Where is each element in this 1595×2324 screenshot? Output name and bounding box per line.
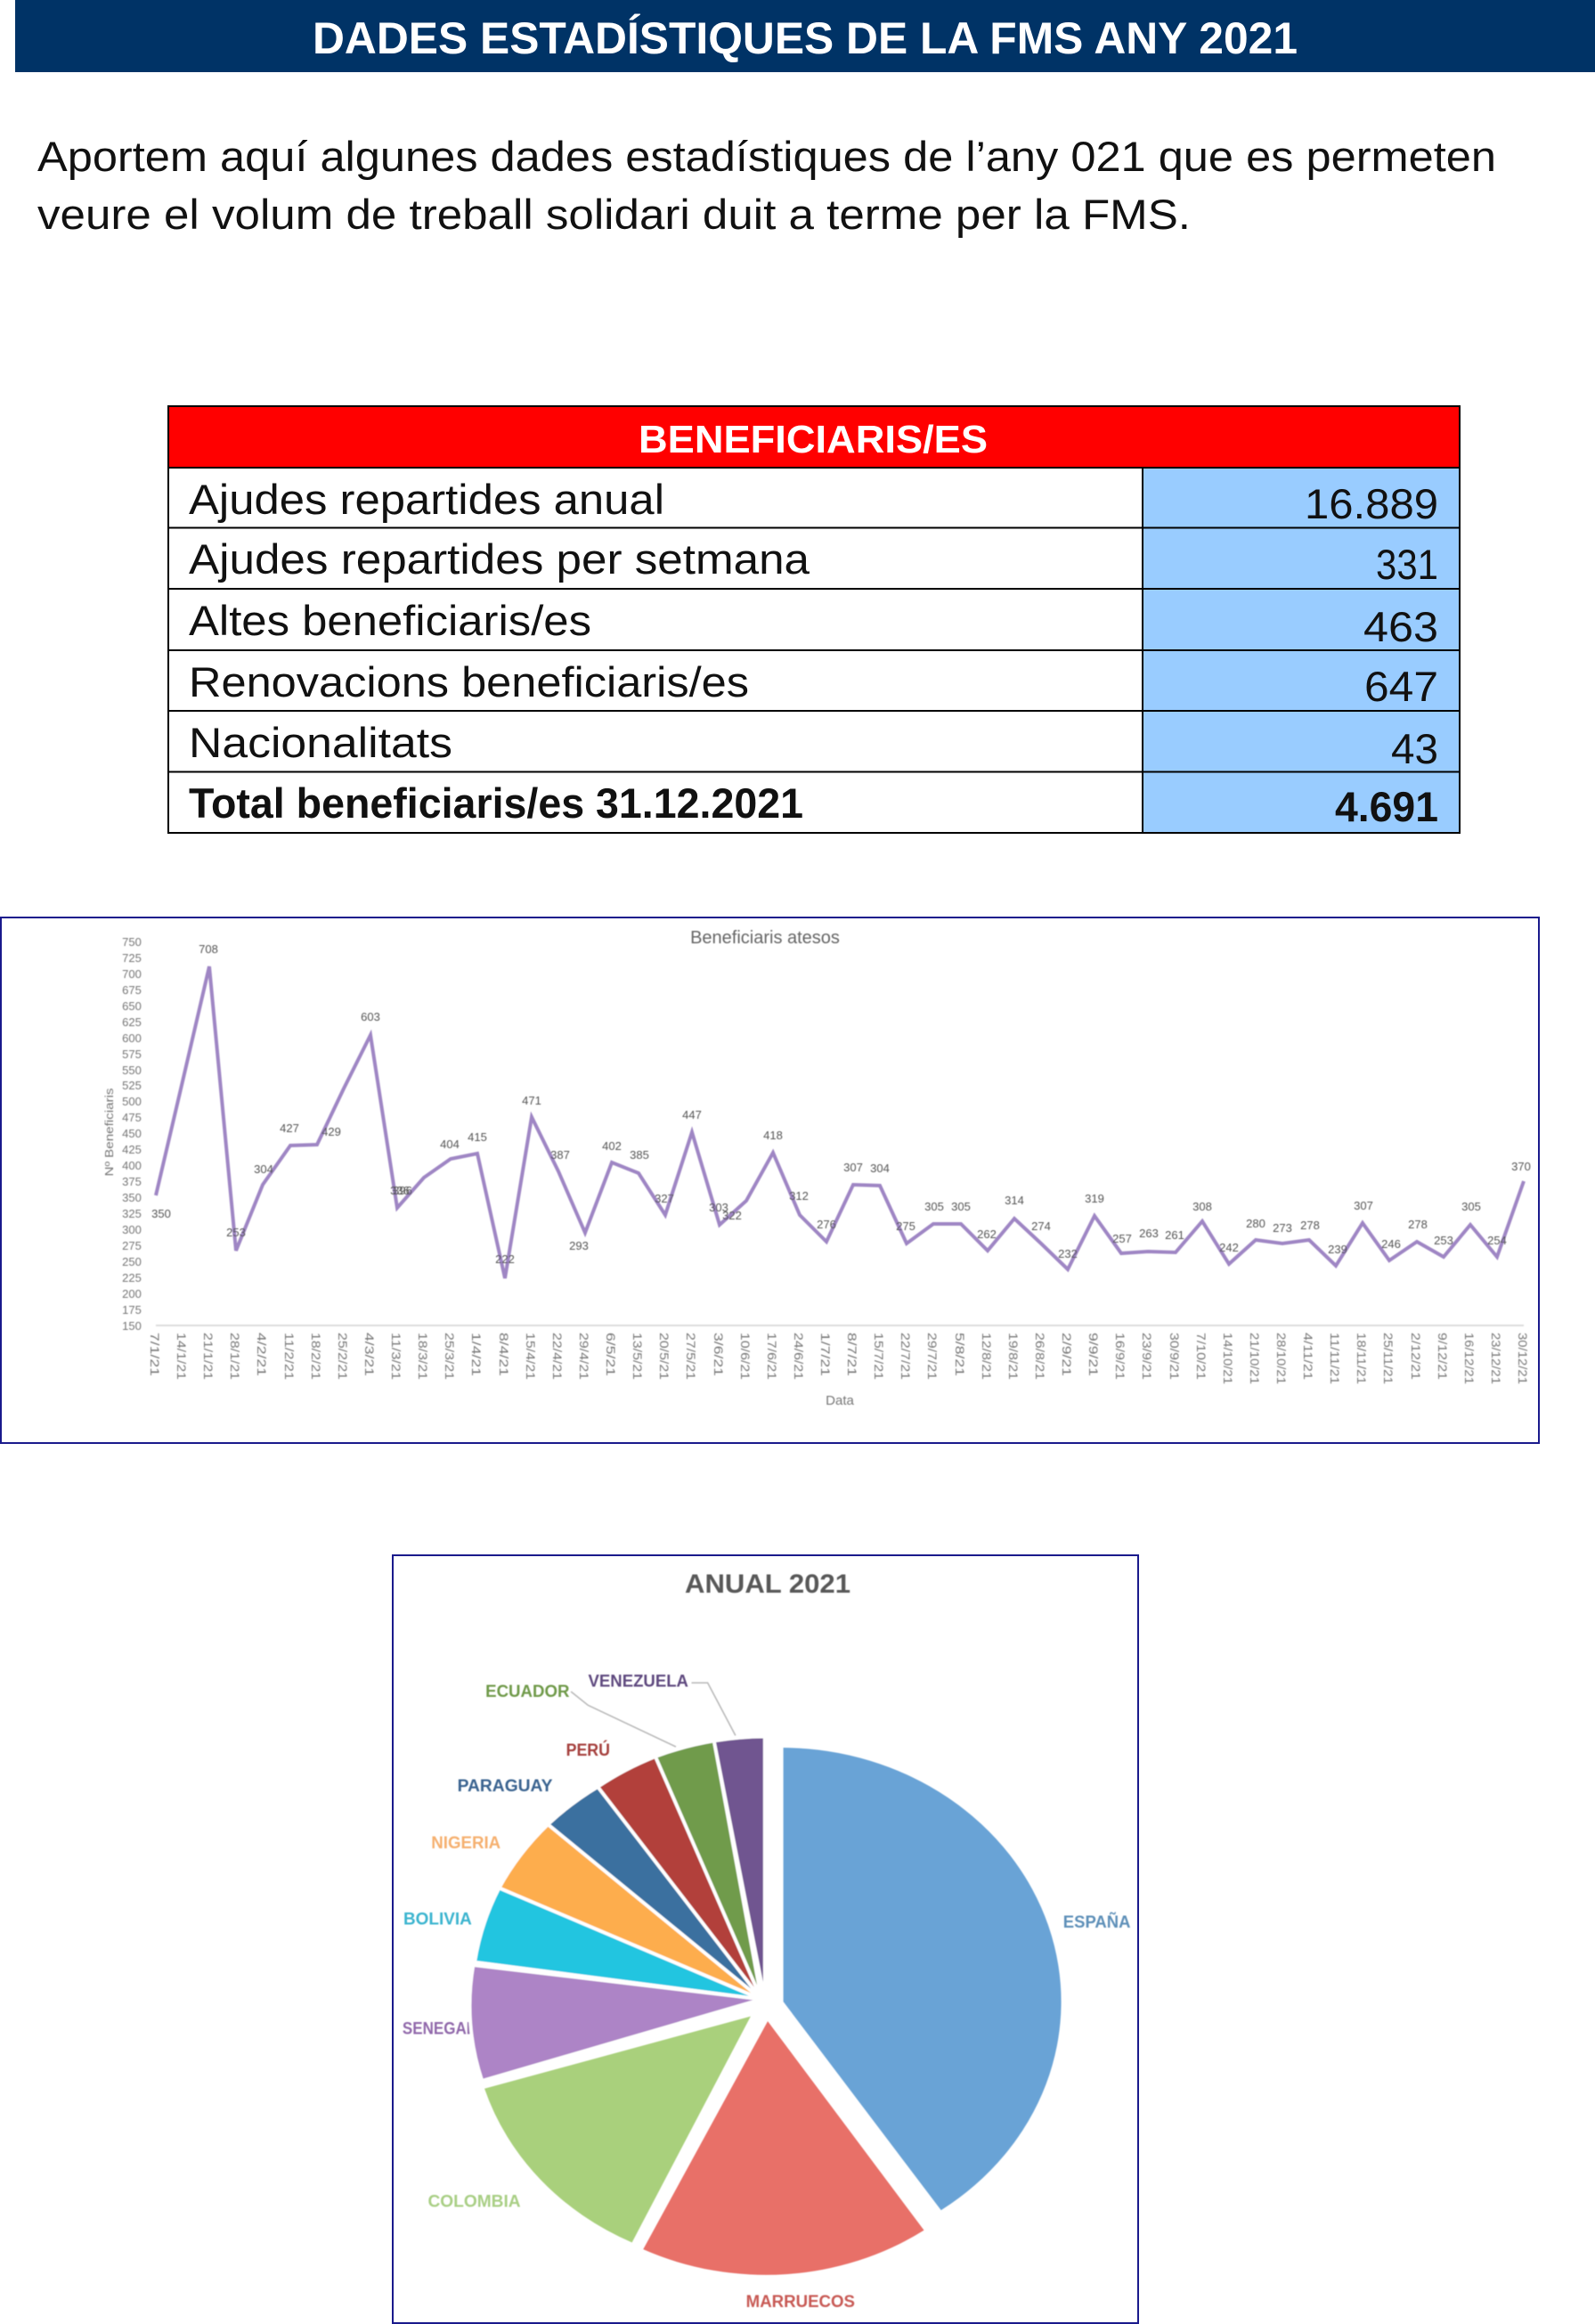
- x axis date labels: 16/9/21: [1113, 1333, 1127, 1380]
- pie labels: MARRUECOS: [746, 2293, 855, 2312]
- data labels: 471: [522, 1094, 541, 1107]
- x axis date labels: 13/5/21: [631, 1333, 645, 1380]
- x axis date labels: 6/5/21: [604, 1333, 618, 1376]
- x axis date labels: 24/6/21: [792, 1333, 806, 1380]
- y axis labels: 450: [122, 1127, 142, 1140]
- table: beneficiaris: 4.691: [1335, 783, 1438, 830]
- y axis labels: 275: [122, 1239, 142, 1252]
- data labels: 257: [1112, 1232, 1132, 1245]
- x axis date labels: 14/1/21: [175, 1333, 189, 1380]
- x axis date labels: 30/12/21: [1516, 1333, 1530, 1384]
- y axis labels: 400: [122, 1159, 142, 1172]
- pie labels: PERÚ: [566, 1741, 610, 1760]
- chart title: Beneficiaris atesos: [690, 928, 840, 948]
- data labels: 370: [1511, 1160, 1531, 1173]
- table: beneficiaris: [168, 406, 1460, 833]
- data labels: 708: [199, 942, 218, 956]
- data labels: 278: [1300, 1219, 1320, 1232]
- data labels: 418: [763, 1129, 783, 1142]
- data labels: 304: [254, 1162, 273, 1176]
- data labels: 293: [569, 1239, 589, 1252]
- table: beneficiaris: Renovacions beneficiaris/es: [189, 658, 749, 705]
- data labels: 312: [789, 1189, 809, 1203]
- data labels: 314: [1005, 1194, 1024, 1207]
- data labels: 402: [602, 1139, 622, 1153]
- table: beneficiaris: 463: [1363, 603, 1438, 650]
- data labels: 303: [709, 1201, 728, 1214]
- x axis date labels: 4/3/21: [362, 1333, 377, 1376]
- data labels: 246: [1381, 1237, 1401, 1251]
- pie labels: [403, 1673, 1131, 2312]
- table: beneficiaris: 647: [1364, 663, 1438, 710]
- x axis date labels: 2/12/21: [1409, 1333, 1423, 1380]
- data labels: 429: [321, 1125, 341, 1138]
- data labels: 273: [1273, 1221, 1292, 1235]
- data labels: 275: [896, 1219, 915, 1233]
- x axis date labels: 25/2/21: [336, 1333, 350, 1380]
- x axis title: Data: [826, 1393, 854, 1408]
- data labels: 261: [1165, 1228, 1184, 1242]
- data labels: 263: [1139, 1227, 1159, 1240]
- x axis date labels: [148, 1333, 1530, 1384]
- x axis date labels: 18/3/21: [416, 1333, 430, 1380]
- data labels: 262: [977, 1227, 997, 1241]
- x axis date labels: 3/6/21: [712, 1333, 726, 1376]
- data labels: 222: [495, 1252, 515, 1266]
- table: beneficiaris: Nacionalitats: [189, 719, 452, 766]
- pie labels: NIGERIA: [431, 1834, 500, 1853]
- x axis date labels: 29/4/21: [577, 1333, 591, 1380]
- table: beneficiaris: Total beneficiaris/es 31.12.2021: [189, 779, 803, 827]
- x axis date labels: 8/4/21: [497, 1333, 511, 1376]
- x axis date labels: 4/2/21: [255, 1333, 269, 1376]
- data labels: 404: [440, 1138, 460, 1151]
- data labels: 308: [1192, 1200, 1212, 1213]
- data labels: 305: [924, 1200, 944, 1213]
- x axis date labels: 28/1/21: [228, 1333, 242, 1380]
- data labels: 304: [870, 1162, 890, 1175]
- y axis labels: 300: [122, 1223, 142, 1236]
- y axis labels: 500: [122, 1095, 142, 1108]
- x axis date labels: 25/3/21: [443, 1333, 457, 1380]
- y axis labels: 700: [122, 967, 142, 981]
- data labels: 387: [550, 1148, 570, 1162]
- x axis date labels: 21/10/21: [1248, 1333, 1262, 1384]
- table: beneficiaris: Altes beneficiaris/es: [189, 597, 591, 644]
- data labels: 274: [1031, 1219, 1051, 1233]
- y axis labels: 425: [122, 1143, 142, 1156]
- x axis date labels: 23/9/21: [1140, 1333, 1154, 1380]
- x axis date labels: 18/2/21: [309, 1333, 323, 1380]
- x axis date labels: 30/9/21: [1168, 1333, 1182, 1380]
- x axis date labels: 22/4/21: [550, 1333, 565, 1380]
- pie labels: SENEGAL: [403, 2019, 476, 2038]
- y axis labels: 525: [122, 1079, 142, 1092]
- data labels: 603: [361, 1010, 380, 1023]
- y axis labels: [122, 935, 142, 1333]
- x axis date labels: 27/5/21: [684, 1333, 698, 1380]
- data labels: 276: [817, 1218, 836, 1231]
- pie slices: [470, 1736, 1062, 2275]
- x axis date labels: 20/5/21: [657, 1333, 671, 1380]
- x axis date labels: 11/2/21: [282, 1333, 297, 1380]
- data labels: 278: [1408, 1218, 1428, 1231]
- y axis labels: 475: [122, 1111, 142, 1124]
- data labels: 322: [722, 1209, 742, 1222]
- data labels: 385: [630, 1148, 649, 1162]
- data labels: 319: [1085, 1192, 1104, 1205]
- data labels: 280: [1246, 1217, 1265, 1230]
- table: beneficiaris: 16.889: [1305, 480, 1438, 527]
- x axis date labels: 9/9/21: [1086, 1333, 1101, 1376]
- x axis date labels: 12/8/21: [980, 1333, 994, 1380]
- x axis date labels: 15/7/21: [872, 1333, 886, 1380]
- y axis labels: 575: [122, 1048, 142, 1061]
- x axis date labels: 16/12/21: [1462, 1333, 1477, 1384]
- x axis date labels: 22/7/21: [899, 1333, 913, 1380]
- data labels: 239: [1328, 1243, 1347, 1256]
- y axis labels: 175: [122, 1303, 142, 1317]
- data labels: 350: [151, 1207, 171, 1220]
- data labels: [151, 942, 1531, 1266]
- pie labels: ECUADOR: [485, 1683, 570, 1701]
- data labels: 415: [468, 1130, 487, 1144]
- table: beneficiaris: 43: [1391, 725, 1438, 772]
- y axis labels: 750: [122, 935, 142, 949]
- data labels: 336: [390, 1184, 410, 1197]
- x axis date labels: 21/1/21: [201, 1333, 216, 1380]
- y axis labels: 550: [122, 1064, 142, 1077]
- data labels: 447: [682, 1108, 702, 1121]
- x axis date labels: 1/4/21: [469, 1333, 484, 1376]
- data labels: 396: [393, 1184, 412, 1197]
- x axis date labels: 5/8/21: [953, 1333, 967, 1376]
- x axis date labels: 17/6/21: [765, 1333, 779, 1380]
- table: beneficiaris: BENEFICIARIS/ES: [639, 418, 988, 461]
- pie labels: PARAGUAY: [458, 1777, 553, 1796]
- y axis labels: 350: [122, 1191, 142, 1204]
- table: beneficiaris: 331: [1376, 541, 1438, 588]
- y axis labels: 250: [122, 1255, 142, 1268]
- x axis date labels: 18/11/21: [1355, 1333, 1369, 1384]
- data labels: 327: [655, 1192, 674, 1205]
- x axis date labels: 28/10/21: [1274, 1333, 1289, 1384]
- title banner: DADES ESTADÍSTIQUES DE LA FMS ANY 2021: [313, 13, 1298, 63]
- y axis labels: 325: [122, 1207, 142, 1220]
- x axis date labels: 23/12/21: [1489, 1333, 1503, 1384]
- leader lines: [571, 1683, 736, 1747]
- x axis date labels: 15/4/21: [524, 1333, 538, 1380]
- intro text: veure el volum de treball solidari duit a terme per la FMS.: [37, 191, 1191, 238]
- intro text: Aportem aquí algunes dades estadístiques de l’any 021 que es permeten: [37, 133, 1496, 180]
- y axis labels: 600: [122, 1032, 142, 1045]
- title banner: [15, 0, 1595, 72]
- pie labels: BOLIVIA: [403, 1911, 472, 1929]
- x axis date labels: 25/11/21: [1381, 1333, 1396, 1384]
- table: beneficiaris: Ajudes repartides anual: [189, 476, 664, 523]
- panel: pie chart anual 2021: [393, 1555, 1138, 2323]
- intro text: [37, 133, 1496, 238]
- x axis date labels: 4/11/21: [1301, 1333, 1315, 1380]
- y axis labels: 375: [122, 1175, 142, 1188]
- data labels: 305: [951, 1200, 971, 1213]
- data labels: 305: [1461, 1200, 1481, 1213]
- y axis labels: 150: [122, 1319, 142, 1333]
- y axis labels: 625: [122, 1015, 142, 1029]
- y axis labels: 225: [122, 1271, 142, 1284]
- x axis date labels: 7/10/21: [1194, 1333, 1208, 1380]
- data labels: 307: [843, 1161, 863, 1174]
- x axis date labels: 29/7/21: [925, 1333, 940, 1380]
- x axis date labels: 19/8/21: [1006, 1333, 1021, 1380]
- x axis date labels: 26/8/21: [1033, 1333, 1047, 1380]
- pie labels: COLOMBIA: [427, 2192, 521, 2211]
- pie title: ANUAL 2021: [685, 1570, 850, 1599]
- x axis date labels: 1/7/21: [818, 1333, 833, 1376]
- x axis date labels: 8/7/21: [845, 1333, 859, 1376]
- x axis date labels: 10/6/21: [738, 1333, 753, 1380]
- y axis labels: 725: [122, 951, 142, 965]
- line series: [156, 966, 1524, 1278]
- data labels: 254: [1487, 1234, 1507, 1247]
- x axis date labels: 11/3/21: [389, 1333, 403, 1380]
- data labels: 427: [280, 1121, 299, 1135]
- x axis date labels: 9/12/21: [1436, 1333, 1450, 1380]
- pie labels: VENEZUELA: [589, 1673, 688, 1692]
- panel: line chart beneficiaris atesos: [1, 917, 1539, 1443]
- y axis labels: 675: [122, 983, 142, 997]
- data labels: 253: [1434, 1234, 1453, 1247]
- y axis labels: 650: [122, 999, 142, 1013]
- data labels: 242: [1219, 1241, 1239, 1254]
- x axis date labels: 14/10/21: [1221, 1333, 1235, 1384]
- data labels: 253: [226, 1226, 246, 1239]
- y axis title: Nº Beneficiaris: [102, 1088, 116, 1176]
- pie labels: ESPAÑA: [1063, 1912, 1131, 1932]
- x axis date labels: 7/1/21: [148, 1333, 162, 1376]
- y axis labels: 200: [122, 1287, 142, 1301]
- data labels: 307: [1354, 1199, 1373, 1212]
- x axis date labels: 11/11/21: [1328, 1333, 1342, 1384]
- data labels: 232: [1058, 1247, 1078, 1260]
- x axis date labels: 2/9/21: [1060, 1333, 1074, 1376]
- table: beneficiaris: Ajudes repartides per setmana: [189, 535, 810, 583]
